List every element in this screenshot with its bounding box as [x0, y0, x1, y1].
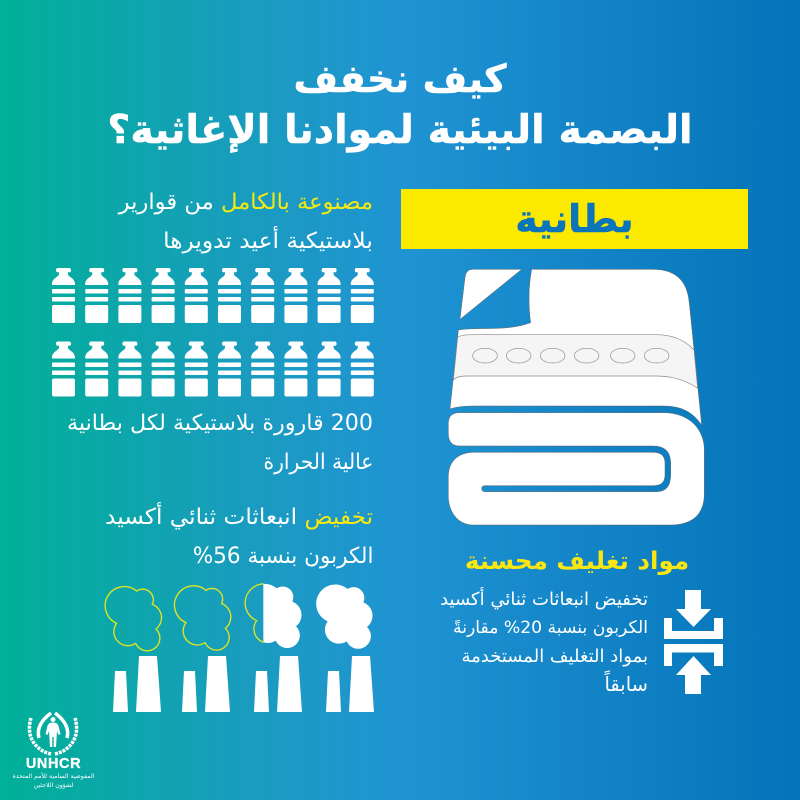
- logo: UNHCR: [12, 712, 94, 789]
- text: carbon 56 percent: الكربون بنسبة 56%: [192, 544, 373, 569]
- logo wordmark: UNHCR: [26, 756, 81, 772]
- heading: improved packaging: مواد تغليف محسنة: [465, 546, 689, 575]
- title line 2: البصمة البيئية لموادنا الإغاثية؟: [107, 107, 693, 153]
- logo arabic name: [12, 772, 94, 789]
- banner heading: بطانية: [515, 197, 634, 241]
- text: packaging line 3: بمواد التغليف المستخدمة: [461, 646, 648, 667]
- logo arabic name: لشؤون اللاجئين: [34, 782, 73, 789]
- text: packaging line 1: تخفيض انبعاثات ثنائي أكسيد: [440, 589, 648, 610]
- text: reduce emissions: تخفيض انبعاثات ثنائي أكسيد: [105, 505, 373, 530]
- text: recycled bottles: مصنوعة بالكامل من قوارير: [119, 190, 373, 215]
- text: packaging line 4: سابقاً: [604, 673, 648, 696]
- text: packaging line 2: الكربون بنسبة 20% مقارنةً: [453, 618, 648, 638]
- title: [107, 57, 693, 154]
- text: high thermal: عالية الحرارة: [263, 450, 373, 475]
- title line 1: كيف نخفف: [293, 57, 507, 102]
- text: plastic bottles recycled: بلاستيكية أعيد تدويرها: [163, 229, 373, 254]
- banner: blanket: [401, 189, 748, 249]
- text: 200 bottles per blanket: 200 قارورة بلاستيكية لكل بطانية: [67, 411, 373, 436]
- logo emblem: [28, 712, 78, 756]
- logo arabic name: المفوضية السامية للأمم المتحدة: [13, 773, 94, 780]
- smoke stacks pictogram: [104, 583, 374, 712]
